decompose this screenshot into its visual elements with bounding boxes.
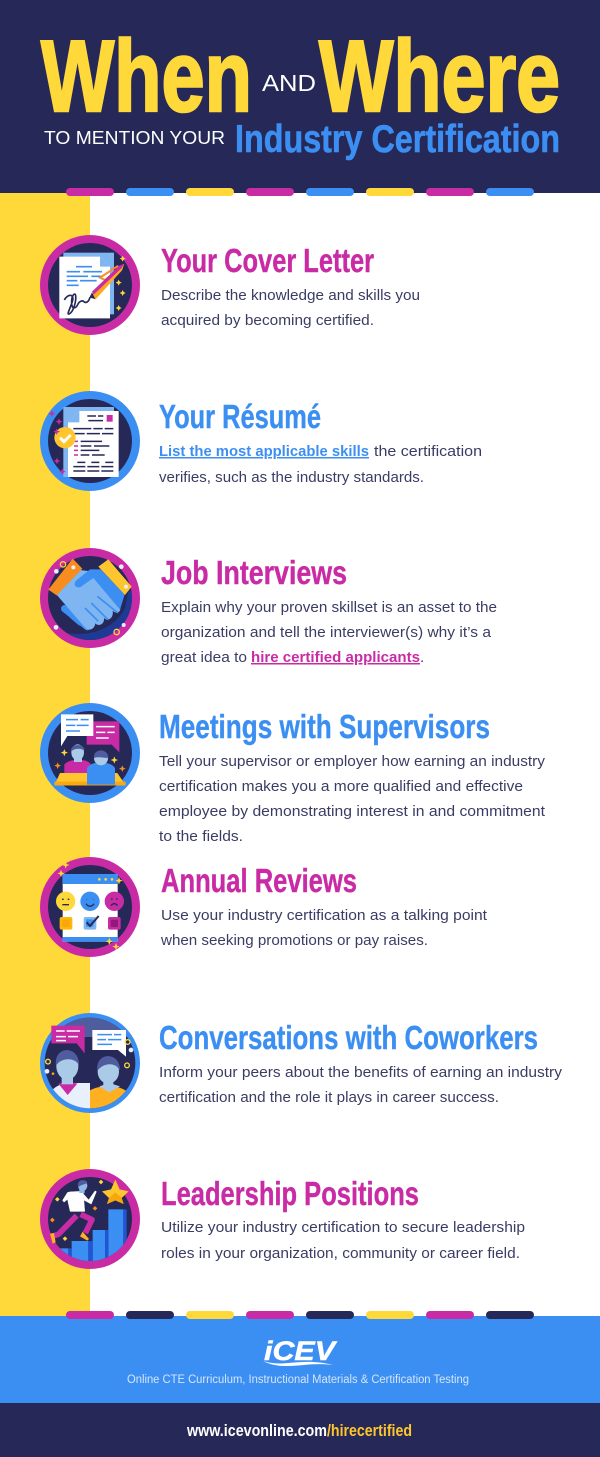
title: When and Where: When — [41, 21, 252, 133]
text: meetings: certification makes you a more qualified and effective — [159, 778, 523, 795]
heading: your cover letter: Your Cover Letter — [161, 243, 374, 280]
icon: resume — [40, 391, 140, 491]
text: annual reviews: when seeking promotions or pay raises. — [160, 932, 428, 949]
icon: cover letter — [40, 235, 140, 335]
text: leadership — [161, 1219, 525, 1262]
text: job interviews: organization and tell the interviewer(s) why it’s a — [161, 624, 492, 641]
text: cover letter — [161, 287, 420, 329]
text: coworkers: Inform your peers about the benefits of earning an industry — [159, 1064, 563, 1081]
text: coworkers: certification and the role it plays in career success. — [159, 1089, 499, 1106]
footer: url band — [0, 1403, 600, 1457]
icon: handshake — [40, 548, 140, 648]
title: When and Where — [41, 21, 560, 133]
subtitle: TO MENTION YOUR — [44, 127, 225, 148]
text: annual reviews — [160, 907, 488, 949]
heading: leadership positions: Leadership Positions — [161, 1176, 419, 1213]
logo: iCEV: iCEV — [264, 1336, 337, 1366]
text: meetings — [159, 753, 546, 845]
text: resume: verifies, such as the industry standards. — [159, 469, 424, 486]
text: resume: the certification — [374, 443, 482, 460]
text: meetings: to the fields. — [159, 828, 243, 845]
header band — [0, 0, 600, 193]
yellow sidebar — [0, 192, 90, 1318]
icon: meetings — [40, 703, 140, 803]
footer: url band: /hirecertified — [327, 1421, 412, 1440]
text: job interviews: great idea to — [161, 649, 247, 666]
heading: annual reviews: Annual Reviews — [161, 863, 357, 900]
heading: meetings with supervisors: Meetings with Supervisors — [159, 709, 490, 746]
text: resume: List the most applicable skills — [159, 443, 369, 460]
footer: blue band — [0, 1316, 600, 1403]
bottom dashed divider — [66, 1311, 534, 1319]
text: annual reviews: Use your industry certification as a talking point — [161, 907, 488, 924]
text: job interviews: . — [420, 649, 424, 666]
text: job interviews — [161, 599, 497, 666]
text: cover letter: Describe the knowledge and skills you — [161, 287, 420, 304]
icon: coworkers — [40, 1013, 140, 1113]
text: job interviews: Explain why your proven skillset is an asset to the — [161, 599, 497, 616]
heading: your resume: Your Résumé — [159, 399, 321, 436]
text: leadership: roles in your organization, community or career field. — [161, 1245, 520, 1262]
heading: job interviews: Job Interviews — [161, 555, 347, 592]
top dashed divider — [66, 188, 534, 196]
text: coworkers — [159, 1064, 563, 1106]
subtitle — [44, 118, 560, 161]
icon: annual reviews — [40, 857, 140, 957]
text: job interviews: hire certified applicants — [251, 649, 420, 666]
text: meetings: Tell your supervisor or employer how earning an industry — [159, 753, 546, 770]
text: meetings: employee by demonstrating interest in and commitment — [159, 803, 546, 820]
text: resume — [159, 443, 482, 486]
footer: url band: www.icevonline.com — [186, 1421, 327, 1440]
tagline: Online CTE Curriculum, Instructional Materials & Certification Testing — [127, 1374, 469, 1386]
icon: leadership — [40, 1169, 140, 1269]
text: cover letter: acquired by becoming certified. — [161, 312, 374, 329]
title: When and Where: AND — [262, 70, 316, 96]
text: leadership: Utilize your industry certification to secure leadership — [161, 1219, 525, 1236]
